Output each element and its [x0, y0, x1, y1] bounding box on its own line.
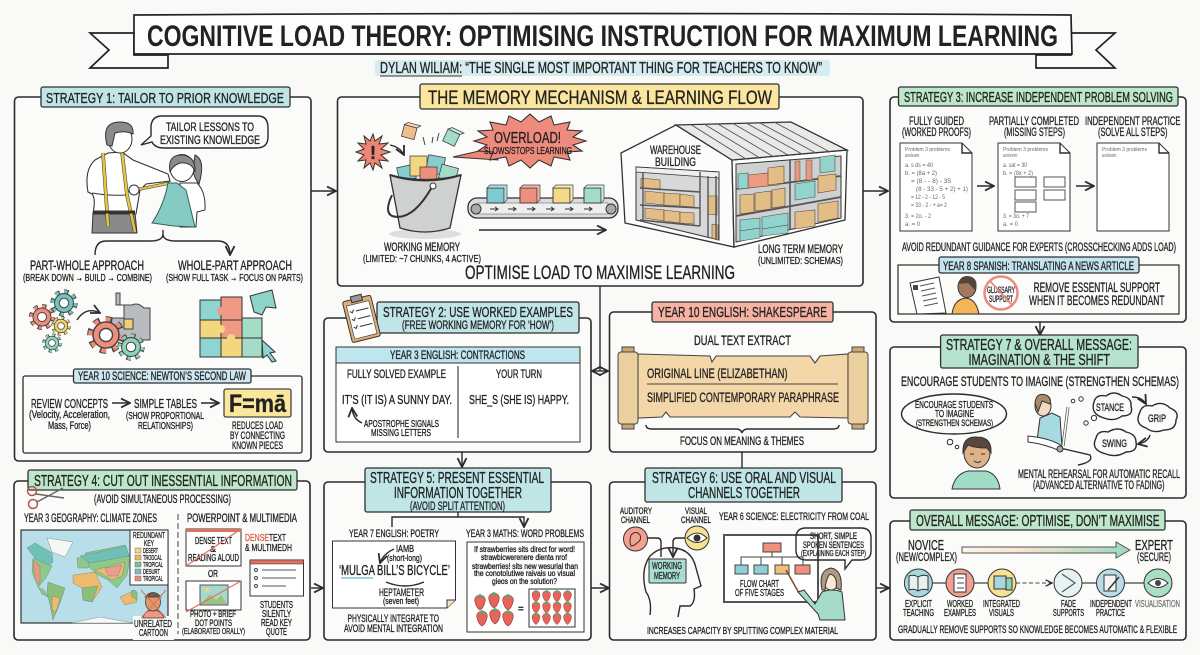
label: novice — [896, 537, 957, 564]
icon: unrelated cartoon: CARTOON — [139, 627, 168, 639]
slide: students silently read key quote — [250, 560, 304, 638]
subtitle quote: DYLAN WILIAM: “THE SINGLE MOST IMPORTANT THING FOR TEACHERS TO KNOW” — [380, 60, 822, 77]
column: fully guided: (8 - 33 - 5 + 2) + 1) — [916, 187, 968, 193]
column: fully guided: Problem 3 problems — [905, 147, 950, 153]
box: year 10 science: Mass, Force) — [48, 420, 91, 432]
arrow: strategy 2 to strategy 5 — [461, 452, 463, 467]
icon: ear — [624, 527, 648, 551]
text: part-whole approach: (BREAK DOWN → BUILD → COMBINE) — [23, 272, 152, 284]
connector: memory down — [599, 286, 601, 371]
slide: photo and brief dot points: PHOTO + BRIEF — [190, 609, 236, 620]
map key: redundant key: TRODCAL — [143, 555, 162, 562]
connector: Shakespeare to strategy 6 — [741, 452, 743, 468]
card: poem: (short-long) — [387, 553, 422, 564]
label: working memory: WORKING MEMORY — [384, 240, 460, 254]
icon: warehouse — [621, 122, 847, 247]
icon: head with working memory: MEMORY — [654, 571, 680, 582]
label: working memory — [363, 240, 481, 265]
thought bubble: encourage students: (STRENGTHEN SCHEMAS) — [916, 418, 993, 429]
column: independent practice: avoleam: — [1102, 153, 1117, 159]
column: fully guided: = 12 - 2 - 12 - 5 — [911, 195, 946, 201]
heading: strategy 4 — [28, 470, 297, 490]
map key: redundant key: TROPICAL — [143, 562, 163, 569]
icon: warehouse: BUILDING — [655, 155, 696, 169]
label: novice: NOVICE — [908, 537, 944, 554]
heading: strategy 5: STRATEGY 5: PRESENT ESSENTIAL — [370, 470, 544, 487]
panel: strategy 4 — [14, 470, 310, 640]
arrow: dashed fade — [1016, 582, 1052, 584]
text: part-whole approach: PART-WHOLE APPROACH — [30, 258, 144, 273]
heading: year 7 poetry: YEAR 7 ENGLISH: POETRY — [349, 528, 439, 540]
arrow: to Shakespeare — [600, 370, 608, 372]
text: dual text extract: DUAL TEXT EXTRACT — [694, 333, 791, 348]
box: year 10 science: YEAR 10 SCIENCE: NEWTON’S SECOND LAW — [78, 371, 246, 383]
column: independent practice: Problem 3 problems — [1102, 147, 1147, 153]
thought cloud: grip — [1138, 403, 1177, 432]
column: partially completed — [989, 114, 1079, 231]
heading: strategy 6 — [645, 468, 842, 502]
icon: no glossary support — [984, 276, 1018, 310]
heading: strategy 7 — [941, 335, 1138, 369]
box: year 10 science: (SHOW PROPORTIONAL — [126, 410, 204, 422]
icon: unrelated cartoon: UNRELATED — [134, 618, 172, 630]
thought cloud: stance — [1093, 393, 1132, 420]
burst: overload: OVERLOAD! — [494, 130, 561, 147]
heading: climate zones: YEAR 3 GEOGRAPHY: CLIMATE ZONES — [24, 513, 157, 525]
slide: dense text crossed out — [186, 529, 241, 566]
column: partially completed: 3. = 3o. + 7 — [1003, 214, 1030, 220]
arrow: strategy 6 to overall message — [876, 587, 889, 589]
label: fade supports: FADE — [1061, 599, 1076, 610]
text: physically integrate: AVOID MENTAL INTEGRATION — [344, 623, 443, 635]
slide: photo and brief dot points: (ELABORATED ORALLY) — [182, 626, 245, 636]
column: partially completed: (MISSING STEPS) — [1004, 125, 1065, 139]
icon: scissors — [28, 486, 64, 508]
label: expert: EXPERT — [1135, 537, 1173, 554]
icon: fade supports — [1054, 569, 1082, 597]
map key: redundant key: REDUNDANT — [133, 531, 165, 540]
label: independent practice: PRACTICE — [1096, 608, 1125, 619]
slide: students silently read key quote: SILENTLY — [262, 609, 291, 620]
box: year 10 science: REDUCES LOAD — [232, 420, 283, 432]
box: year 10 science: KNOWN PIECES — [232, 440, 283, 452]
text: avoid simultaneous processing: (AVOID SIMULTANEOUS PROCESSING) — [94, 494, 231, 506]
icon: warehouse: WAREHOUSE — [650, 143, 701, 157]
table: year 3 english contractions: IT’S (IT IS) A SUNNY DAY. — [342, 392, 452, 407]
table: year 3 english contractions: YEAR 3 ENGLISH: CONTRACTIONS — [390, 350, 525, 362]
icon: puzzle — [200, 290, 276, 362]
heading: strategy 5: (AVOID SPLIT ATTENTION) — [410, 501, 505, 513]
label: explicit teaching: TEACHING — [903, 608, 934, 619]
label: integrated visuals — [983, 599, 1020, 619]
label: novice: (NEW/COMPLEX) — [896, 552, 957, 564]
column: fully guided — [900, 114, 972, 231]
slide: photo and brief dot points: DOT POINTS — [195, 618, 232, 629]
text: physically integrate: PHYSICALLY INTEGRATE TO — [348, 613, 439, 625]
thought bubble: encourage students — [902, 394, 1006, 449]
heading: memory mechanism: THE MEMORY MECHANISM & LEARNING FLOW — [428, 88, 772, 109]
label: auditory channel — [620, 506, 652, 526]
icon: overflowing bucket — [388, 122, 464, 239]
heading: strategy 6: STRATEGY 6: USE ORAL AND VISUAL — [652, 470, 836, 487]
icon: explicit teaching — [904, 569, 932, 597]
box: year 10 science: F=mā — [229, 390, 287, 418]
icon: visualisation — [1144, 569, 1172, 597]
column: partially completed: Problem 3 problems — [1003, 147, 1048, 153]
column: partially completed: b. = (8x + 2) — [1003, 171, 1033, 177]
card: word problem: gieos on the solution? — [492, 577, 557, 586]
heading: strategy 2: (FREE WORKING MEMORY FOR ‘HOW’) — [402, 320, 554, 332]
text: or: OR — [208, 569, 218, 580]
heading: strategy 1: STRATEGY 1: TAILOR TO PRIOR KNOWLEDGE — [46, 90, 284, 107]
arrows: channels to working memory — [647, 538, 685, 557]
box: year 10 science: RELATIONSHIPS) — [138, 420, 193, 432]
thought cloud: swing — [1094, 429, 1136, 456]
icon: unrelated cartoon — [133, 590, 174, 640]
map key: redundant key: TROPICAL — [143, 576, 163, 583]
slide: students silently read key quote: STUDENTS — [260, 600, 293, 611]
slide: students silently read key quote: QUOTE — [266, 627, 287, 638]
map key: redundant key: KEY — [144, 539, 154, 548]
arrows: fork to examples — [392, 512, 524, 527]
label: working memory: (LIMITED: ~7 CHUNKS, 4 ACTIVE) — [363, 253, 481, 265]
icon: strawberries: = — [518, 604, 524, 615]
slide: dense text crossed out: READING ALOUD — [188, 553, 239, 564]
arrow: to strategy 2 — [592, 370, 600, 372]
label: long term memory: (UNLIMITED: SCHEMAS) — [758, 255, 843, 267]
card: poem: (seven feet) — [383, 596, 419, 607]
table: year 3 english contractions: APOSTROPHE SIGNALS — [364, 418, 439, 430]
map key: redundant key — [130, 530, 168, 585]
whiteboard: flow chart — [724, 535, 818, 602]
box: year 10 science — [23, 369, 302, 453]
speech bubble: short spoken sentences — [796, 528, 871, 569]
text: physically integrate — [344, 613, 443, 635]
panel: strategy 2 — [324, 292, 591, 452]
heading: strategy 4: STRATEGY 4: CUT OUT INESSENTIAL INFORMATION — [34, 473, 292, 490]
speech bubble: tailor lessons: EXISTING KNOWLEDGE — [160, 133, 260, 147]
icon: independent practice — [1096, 569, 1124, 597]
table: year 3 english contractions: MISSING LETTERS — [371, 427, 431, 439]
timeline connectors — [918, 582, 1158, 584]
icon: conveyor belt — [468, 185, 618, 218]
icon: integrated visuals — [988, 569, 1016, 597]
speech bubble: tailor lessons: TAILOR LESSONS TO — [166, 120, 254, 134]
box: year 10 science: SIMPLE TABLES — [134, 396, 197, 411]
card: poem: IAMB — [396, 543, 414, 555]
label: integrated visuals: VISUALS — [989, 608, 1014, 619]
card: word problem: If strawberries sits direct for word! — [474, 545, 575, 554]
label: fade supports — [1053, 599, 1084, 619]
table: year 3 english contractions: FULLY SOLVED EXAMPLE — [347, 367, 446, 381]
arrow: novice to expert — [962, 542, 1130, 558]
whiteboard: flow chart: FLOW CHART — [740, 579, 779, 590]
card: word problem: the conotolutiwe raivais uo visual — [474, 569, 575, 578]
arrow: strategy 1 to memory — [311, 190, 336, 192]
scroll: ORIGINAL LINE (ELIZABETHAN) — [647, 365, 788, 381]
label: integrated visuals: INTEGRATED — [983, 599, 1020, 610]
card: word problem — [467, 542, 584, 632]
heading: strategy 1 — [41, 87, 290, 107]
speech bubble: short spoken sentences: SHORT, SIMPLE — [810, 531, 857, 541]
slide: dense text crossed out: & — [210, 545, 217, 554]
box: year 10 science: BY CONNECTING — [230, 430, 285, 442]
column: fully guided: 3. = 2o. - 2 — [905, 214, 932, 220]
icon: clipboard — [342, 292, 381, 343]
icon: warning burst — [356, 134, 390, 170]
text: whole-part approach — [166, 258, 303, 284]
map key: redundant key: DESERT — [143, 548, 158, 555]
map key: redundant key: DESURT — [143, 569, 160, 576]
column: partially completed: PARTIALLY COMPLETED — [989, 114, 1079, 128]
box: year 10 science: (Velocity, Acceleration, — [29, 409, 110, 421]
label: worked examples: EXAMPLES — [944, 608, 976, 619]
slide: photo and brief dot points — [182, 581, 245, 636]
column: partially completed: a. sat = 30 — [1003, 163, 1028, 169]
card: word problem: strawbicwerenere dienta nrof — [481, 553, 568, 562]
label: explicit teaching: EXPLICIT — [905, 599, 932, 610]
arrow: flow to long term memory — [479, 229, 606, 231]
label: dense text and multimedia: DENSE — [245, 532, 269, 544]
column: independent practice — [1085, 114, 1180, 231]
icon: no glossary support: SUPPORT — [989, 294, 1013, 304]
thought bubble: encourage students: TO IMAGINE — [935, 409, 974, 420]
label: long term memory: LONG TERM MEMORY — [758, 242, 843, 256]
label: independent practice: INDEPENDENT — [1090, 599, 1132, 610]
heading: electricity from coal: YEAR 6 SCIENCE: ELECTRICITY FROM COAL — [719, 511, 869, 523]
heading: memory mechanism — [420, 84, 779, 109]
text: part-whole approach — [23, 258, 152, 284]
column: fully guided: = (8 - - 8) - 35 — [911, 179, 952, 185]
slide: dense text crossed out: DENSE TEXT — [195, 536, 232, 547]
label: expert: (SECURE) — [1137, 552, 1171, 564]
column: fully guided: (WORKED PROOFS) — [902, 125, 971, 139]
icon: head with working memory — [644, 548, 701, 617]
label: dense text and multimedia: & MULTIMEDH — [245, 542, 292, 554]
panel: year 10 english shakespeare — [610, 302, 876, 452]
text: increases capacity: INCREASES CAPACITY BY SPLITTING COMPLEX MATERIAL — [647, 625, 838, 637]
heading: strategy 7: IMAGINATION & THE SHIFT — [968, 352, 1110, 369]
text: whole-part approach: (SHOW FULL TASK → FOCUS ON PARTS) — [166, 272, 303, 284]
heading: strategy 5 — [365, 468, 551, 513]
card: poem — [332, 541, 456, 608]
arrow: strategy 3 to strategy 7 — [1039, 322, 1041, 335]
text: focus on meaning: FOCUS ON MEANING & THEMES — [680, 434, 804, 448]
column: fully guided: = 33 - 2 - + a= 2 — [911, 203, 948, 209]
arrow: strategy 5 to strategy 6 — [591, 587, 609, 589]
text: mental rehearsal — [1018, 469, 1180, 492]
icon: warning burst: ! — [370, 143, 376, 163]
column: fully guided: b. = (8a + 2) — [905, 171, 937, 177]
column: partially completed: avolvem: — [1003, 153, 1018, 159]
thought cloud: stance: STANCE — [1096, 402, 1124, 414]
heading: strategy 2: STRATEGY 2: USE WORKED EXAMPLES — [383, 304, 573, 321]
panel: strategy 3 — [890, 87, 1186, 322]
panel: strategy 1 — [14, 87, 311, 461]
table: year 3 english contractions — [336, 347, 580, 442]
box: year 8 spanish — [898, 257, 1179, 314]
label: explicit teaching — [903, 599, 934, 619]
column: fully guided: a. s ds = 40 — [905, 163, 934, 169]
thought cloud: swing: SWING — [1102, 438, 1127, 450]
label: fade supports: SUPPORTS — [1053, 608, 1084, 619]
panel: strategy 7 — [890, 335, 1186, 498]
heading: strategy 2 — [377, 302, 579, 333]
speech bubble: short spoken sentences: SPOKEN SENTENCES — [803, 540, 864, 550]
label: visual channel: VISUAL — [685, 506, 707, 517]
arrows: fork to two approaches — [95, 230, 230, 255]
icon: gears and machine — [32, 292, 150, 358]
panel: memory mechanism — [338, 84, 863, 286]
table: year 3 english contractions: YOUR TURN — [496, 367, 542, 381]
label: auditory channel: CHANNEL — [621, 515, 650, 526]
arrow: strategy 4 to strategy 5 — [311, 587, 323, 589]
burst: overload: SLOWS/STOPS LEARNING — [484, 146, 572, 157]
label: expert — [1135, 537, 1173, 564]
panel: strategy 5 — [324, 468, 591, 640]
column: fully guided: a. = 0 — [905, 222, 921, 228]
divider — [177, 514, 179, 634]
heading: shakespeare: YEAR 10 ENGLISH: SHAKESPEARE — [658, 304, 827, 321]
arrow: fully guided to partially completed — [977, 185, 994, 187]
column: fully guided: avoleam: — [905, 153, 920, 159]
heading: year 3 word problems: YEAR 3 MATHS: WORD PROBLEMS — [466, 528, 584, 540]
icon: teacher measuring student — [87, 122, 205, 233]
box: year 10 science: REVIEW CONCEPTS — [31, 396, 108, 411]
label: worked examples — [944, 599, 976, 619]
scroll — [618, 347, 868, 429]
label: dense text and multimedia: TEXT — [269, 532, 286, 544]
heading: powerpoint and multimedia: POWERPOINT & MULTIMEDIA — [187, 513, 297, 525]
burst: overload — [453, 114, 586, 168]
map: climate zones — [21, 530, 168, 623]
card: poem: ‘MULGA BILL’S BICYCLE’ — [339, 563, 450, 579]
card: word problem: strawberries! sits new wesurial than — [472, 562, 578, 571]
icon: student reading article — [910, 276, 979, 314]
icon: no glossary support: GLOSSARY — [987, 285, 1015, 295]
whiteboard: flow chart: OF FIVE STAGES — [735, 588, 784, 599]
arrow: grip to swing — [1138, 435, 1150, 444]
arrow: partially completed to independent — [1076, 185, 1094, 187]
icon: teacher with pointer — [786, 568, 845, 620]
label: long term memory — [758, 242, 843, 267]
card: poem: HEPTAMETER — [379, 587, 424, 599]
slide: students silently read key quote: READ KEY — [261, 618, 292, 629]
speech bubble: tailor lessons — [141, 116, 268, 148]
label: worked examples: WORKED — [947, 599, 973, 610]
heading: shakespeare — [652, 302, 833, 322]
heading: strategy 6: CHANNELS TOGETHER — [688, 485, 800, 502]
panel: overall message — [890, 510, 1186, 640]
scroll: SIMPLIFIED CONTEMPORARY PARAPHRASE — [647, 389, 839, 405]
arrow: memory to strategy 3 — [863, 190, 888, 192]
thought cloud: grip: GRIP — [1148, 413, 1166, 425]
icon: eye — [685, 526, 709, 550]
speech bubble: short spoken sentences: (EXPLAINING EACH STEP) — [801, 549, 866, 558]
icon: student imagining — [952, 437, 1000, 489]
label: dense text and multimedia — [245, 532, 292, 554]
column: partially completed: a. = 0 — [1003, 222, 1019, 228]
icon: worked examples — [946, 569, 974, 597]
text: whole-part approach: WHOLE-PART APPROACH — [178, 258, 292, 273]
panel: strategy 6 — [610, 468, 876, 640]
label: auditory channel: AUDITORY — [620, 506, 652, 517]
thought bubble: encourage students: ENCOURAGE STUDENTS — [915, 400, 993, 411]
table: year 3 english contractions: SHE_S (SHE IS) HAPPY. — [469, 392, 569, 407]
label: independent practice — [1090, 599, 1132, 619]
text: optimise load: OPTIMISE LOAD TO MAXIMISE LEARNING — [465, 263, 735, 284]
icon: head with working memory: WORKING — [652, 561, 682, 572]
label: visual channel — [681, 506, 711, 526]
brace — [646, 425, 839, 433]
icon: golfer — [1028, 394, 1097, 465]
heading: strategy 5: INFORMATION TOGETHER — [394, 485, 522, 502]
title banner — [90, 14, 1115, 68]
label: visual channel: CHANNEL — [681, 515, 711, 526]
arrow: stance to grip — [1132, 397, 1146, 404]
arrow: chunks entering bucket — [390, 145, 404, 155]
column: fully guided: FULLY GUIDED — [909, 114, 964, 128]
